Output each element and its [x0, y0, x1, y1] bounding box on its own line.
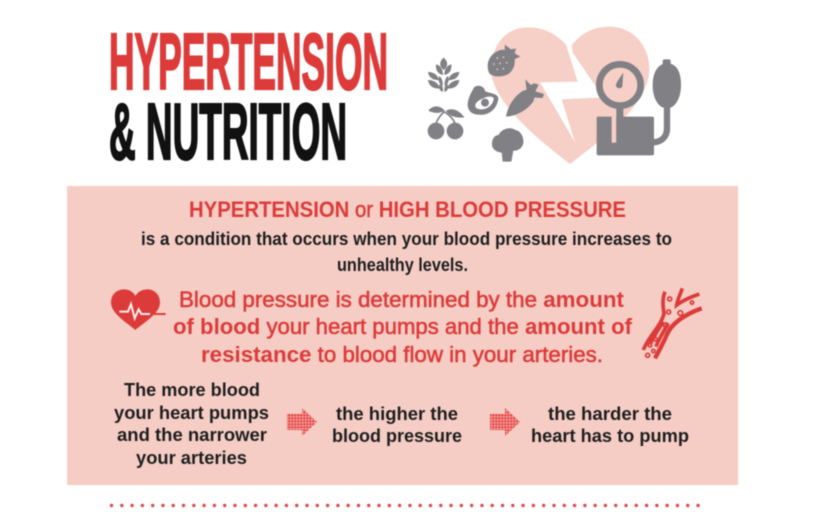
- text block: the more blood: The more blood: [124, 380, 260, 400]
- text block: the higher the blood pressure: blood pressure: [332, 426, 462, 446]
- title: & NUTRITION: [109, 87, 347, 176]
- text block: definition: [141, 229, 672, 275]
- icon: broken heart: [491, 27, 649, 164]
- text block: blood pressure explanation: resistance to blood flow in your arteries.: [201, 342, 603, 367]
- text block: the more blood: [114, 380, 269, 468]
- illustration: broken heart, foods and blood pressure monitor: [428, 27, 681, 164]
- panel: definition: [67, 186, 738, 485]
- text block: definition: is a condition that occurs when your blood pressure increases to: [141, 229, 672, 249]
- text block: the more blood: and the narrower: [117, 425, 267, 445]
- text block: the higher the blood pressure: [332, 404, 462, 446]
- icon: avocado: [468, 86, 498, 115]
- icon: cherries: [428, 106, 464, 139]
- icon: artery: [643, 288, 702, 358]
- text block: the harder the heart has to pump: [531, 404, 689, 446]
- arrow: second: [490, 408, 520, 436]
- text block: the higher the blood pressure: the higher the: [336, 404, 458, 424]
- title: [109, 17, 388, 176]
- heading: HYPERTENSION or HIGH BLOOD PRESSURE: [189, 197, 626, 222]
- text: HYPERTENSION: [109, 17, 388, 106]
- text block: blood pressure explanation: of blood your heart pumps and the amount of: [173, 314, 633, 339]
- icon: heart with pulse: [111, 289, 166, 330]
- icon: wheat: [428, 58, 459, 92]
- text block: blood pressure explanation: Blood pressure is determined by the amount: [179, 287, 625, 312]
- text block: the more blood: your arteries: [136, 448, 247, 468]
- icon: carrot: [506, 79, 544, 117]
- icon: blood pressure monitor: [597, 59, 681, 155]
- arrow: first: [287, 408, 317, 436]
- text block: the more blood: your heart pumps: [114, 403, 269, 423]
- text block: the harder the heart has to pump: the harder the: [548, 404, 672, 424]
- icon: broccoli: [492, 128, 523, 162]
- icon: strawberry: [488, 45, 520, 76]
- text block: blood pressure explanation: [173, 287, 633, 367]
- text block: definition: unhealthy levels.: [337, 255, 468, 275]
- text block: the harder the heart has to pump: heart has to pump: [531, 426, 689, 446]
